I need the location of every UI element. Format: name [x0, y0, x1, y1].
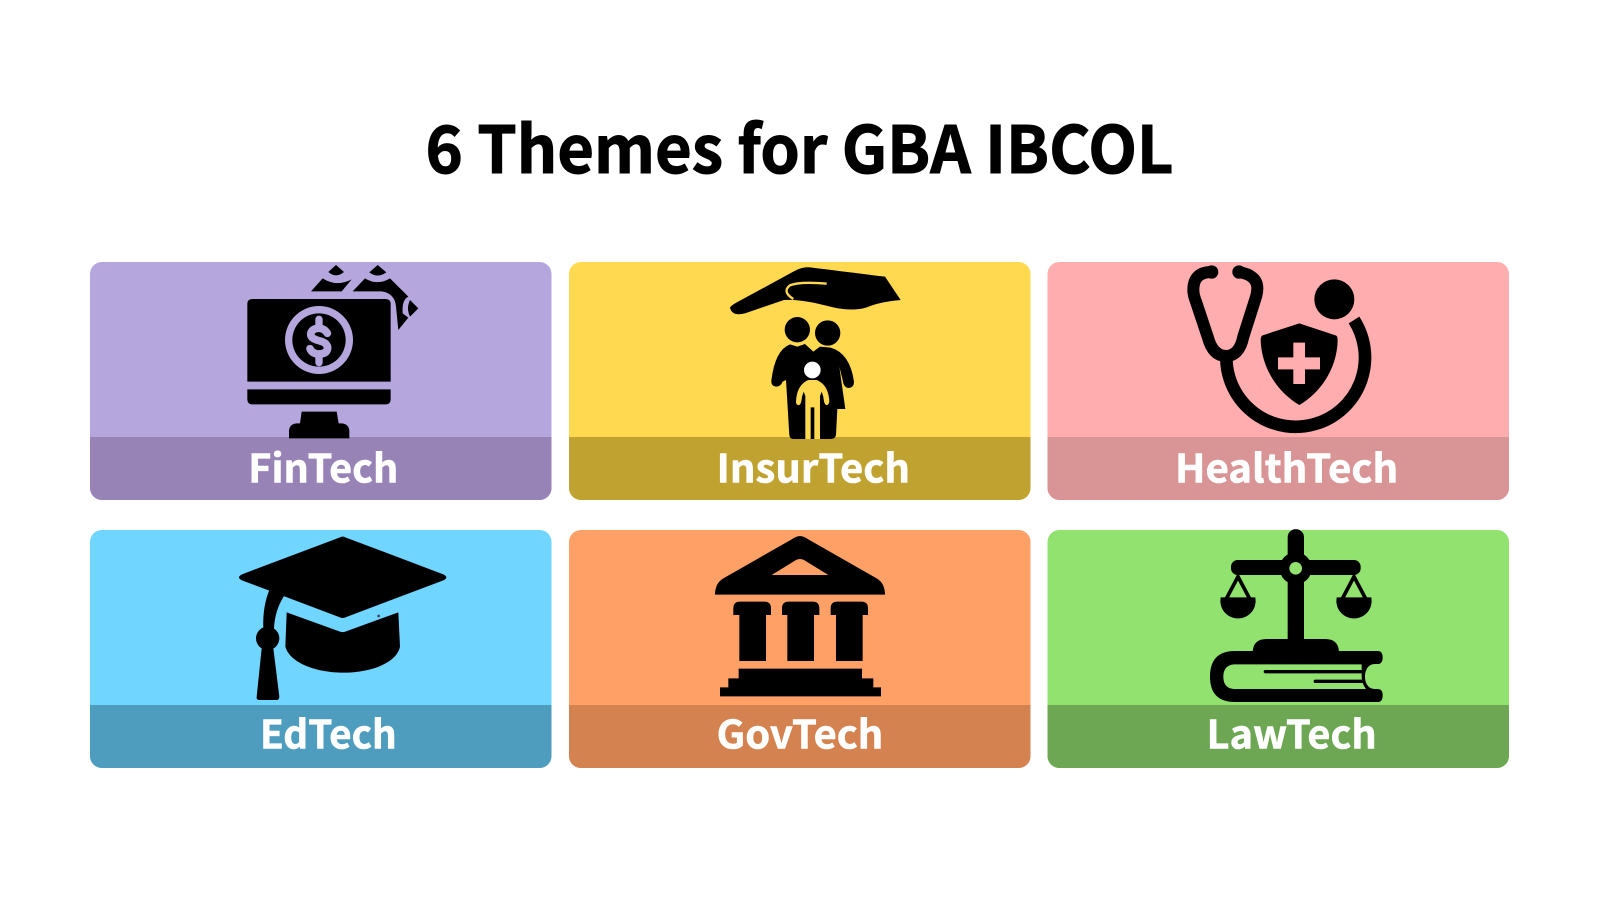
label: EdTech: EdTech [260, 704, 397, 760]
panel: EdTech [90, 530, 552, 768]
panel: FinTech [90, 262, 552, 500]
panel: GovTech [569, 530, 1030, 768]
label: HealthTech: HealthTech [1175, 438, 1398, 494]
icon: computer monitor with dollar and gears [247, 265, 418, 438]
icon: graduation cap [239, 537, 446, 700]
label: InsurTech: InsurTech [717, 438, 910, 494]
label: GovTech: GovTech [717, 704, 883, 760]
panel: LawTech [1048, 529, 1509, 768]
panel: InsurTech [569, 262, 1030, 500]
panel: HealthTech [1048, 262, 1509, 500]
title: 6 Themes for GBA IBCOL [426, 98, 1174, 192]
icon: stethoscope with medical shield [1193, 265, 1365, 427]
label: FinTech: FinTech [248, 438, 398, 494]
label: LawTech: LawTech [1207, 704, 1377, 760]
icon: government building [715, 536, 885, 696]
icon: hand protecting family [730, 267, 901, 439]
icon: scales of justice on a book [1210, 529, 1383, 702]
